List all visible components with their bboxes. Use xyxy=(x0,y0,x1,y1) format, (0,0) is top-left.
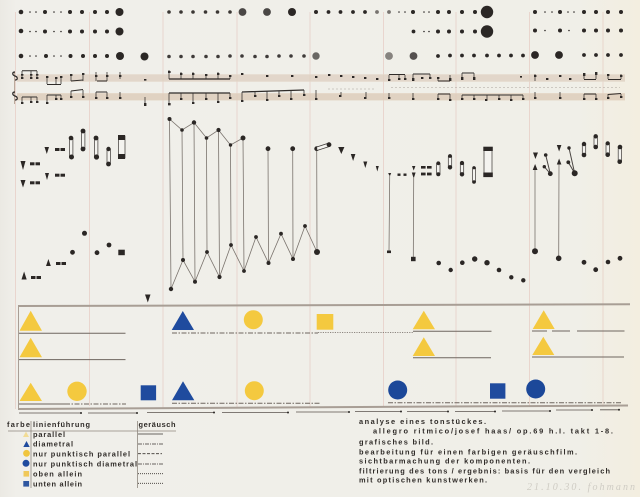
descending triangles and middle section xyxy=(338,147,526,282)
legend rules xyxy=(8,421,176,488)
dot row 1 xyxy=(19,6,623,18)
lower voice graph: opening dots xyxy=(22,231,125,280)
legend item labels: nur punktisch parallel xyxy=(33,450,130,458)
legend headers: farbe xyxy=(7,420,30,429)
squares and bottom markers xyxy=(387,166,432,261)
top voice dots xyxy=(168,117,319,151)
description text block: mit optischen kunstwerken. xyxy=(359,476,487,485)
yellow square xyxy=(317,314,333,330)
blue triangles xyxy=(172,311,194,400)
legend item labels: unten allein xyxy=(33,479,82,488)
blue circles xyxy=(388,380,545,400)
description text block: sichtbarmachung der komponenten. xyxy=(359,457,530,466)
lower staff notes xyxy=(21,90,622,106)
descending bottom dots xyxy=(436,256,526,282)
clefs xyxy=(13,72,17,100)
legend item labels xyxy=(33,430,137,488)
description text block: filtrierung des tons / ergebnis: basis für den vergleich xyxy=(359,466,610,475)
yellow triangles xyxy=(20,310,555,401)
legend headers xyxy=(7,420,176,429)
blue squares xyxy=(141,383,505,400)
faint dynamics row xyxy=(328,88,620,89)
down triangles with square pairs xyxy=(20,147,65,188)
pill end dots xyxy=(69,129,125,166)
description text block xyxy=(359,417,613,485)
legend item labels: oben allein xyxy=(33,470,82,478)
frame rules xyxy=(18,304,630,409)
dots xyxy=(532,146,622,272)
pill ends closing group xyxy=(582,134,622,164)
description text block: bearbeitung für einen farbigen geräuschfilm. xyxy=(359,447,577,456)
descending triangles xyxy=(338,147,416,178)
closing section xyxy=(532,134,622,272)
noise lines solid xyxy=(19,331,624,404)
legend line samples xyxy=(138,434,163,483)
connecting verticals xyxy=(389,175,414,259)
dot row 3 xyxy=(19,51,623,60)
upper staff notes xyxy=(21,70,622,84)
description text block: allegro ritmico/josef haas/ op.69 h.I. takt 1-8. xyxy=(373,426,613,436)
legend table xyxy=(7,420,176,488)
legend item labels: nur punktisch diametral xyxy=(33,460,137,468)
pills closing group xyxy=(582,136,622,162)
slanted pill xyxy=(317,142,331,150)
pills opening group xyxy=(70,131,125,164)
description text block: grafisches bild. xyxy=(359,438,433,447)
legend item labels: diametral xyxy=(33,440,73,449)
panel: colour shapes band xyxy=(18,304,630,409)
bar lines: red vertical measure rules xyxy=(16,12,603,409)
noise lines broken xyxy=(65,332,622,404)
legend headers: linienführung xyxy=(33,420,90,429)
yellow circles xyxy=(67,310,264,401)
verticals and slanted links xyxy=(535,148,575,258)
musical score: two staves xyxy=(13,70,625,106)
pills middle group xyxy=(437,148,492,182)
triangles xyxy=(533,145,561,170)
connecting lines xyxy=(170,119,317,289)
bottom voice dots xyxy=(169,224,320,291)
measure timeline with end dots xyxy=(19,409,620,414)
dot row 2 xyxy=(19,25,623,38)
handwritten signature: 21.10.30. fohmann xyxy=(527,482,635,493)
zigzag graph: top and bottom voices linked xyxy=(168,117,331,291)
upper voice graph: opening triangles, bars and pills xyxy=(20,129,125,188)
legend item labels: parallel xyxy=(33,430,65,439)
description text block: analyse eines tonstückes. xyxy=(359,417,486,426)
legend icons xyxy=(22,432,30,487)
arrow: down triangle above rule xyxy=(145,294,150,302)
legend headers: geräusch xyxy=(138,420,176,429)
top dot rows: rhythm and volume xyxy=(19,6,623,61)
pill ends middle group xyxy=(436,147,493,184)
staff bands xyxy=(14,72,625,104)
